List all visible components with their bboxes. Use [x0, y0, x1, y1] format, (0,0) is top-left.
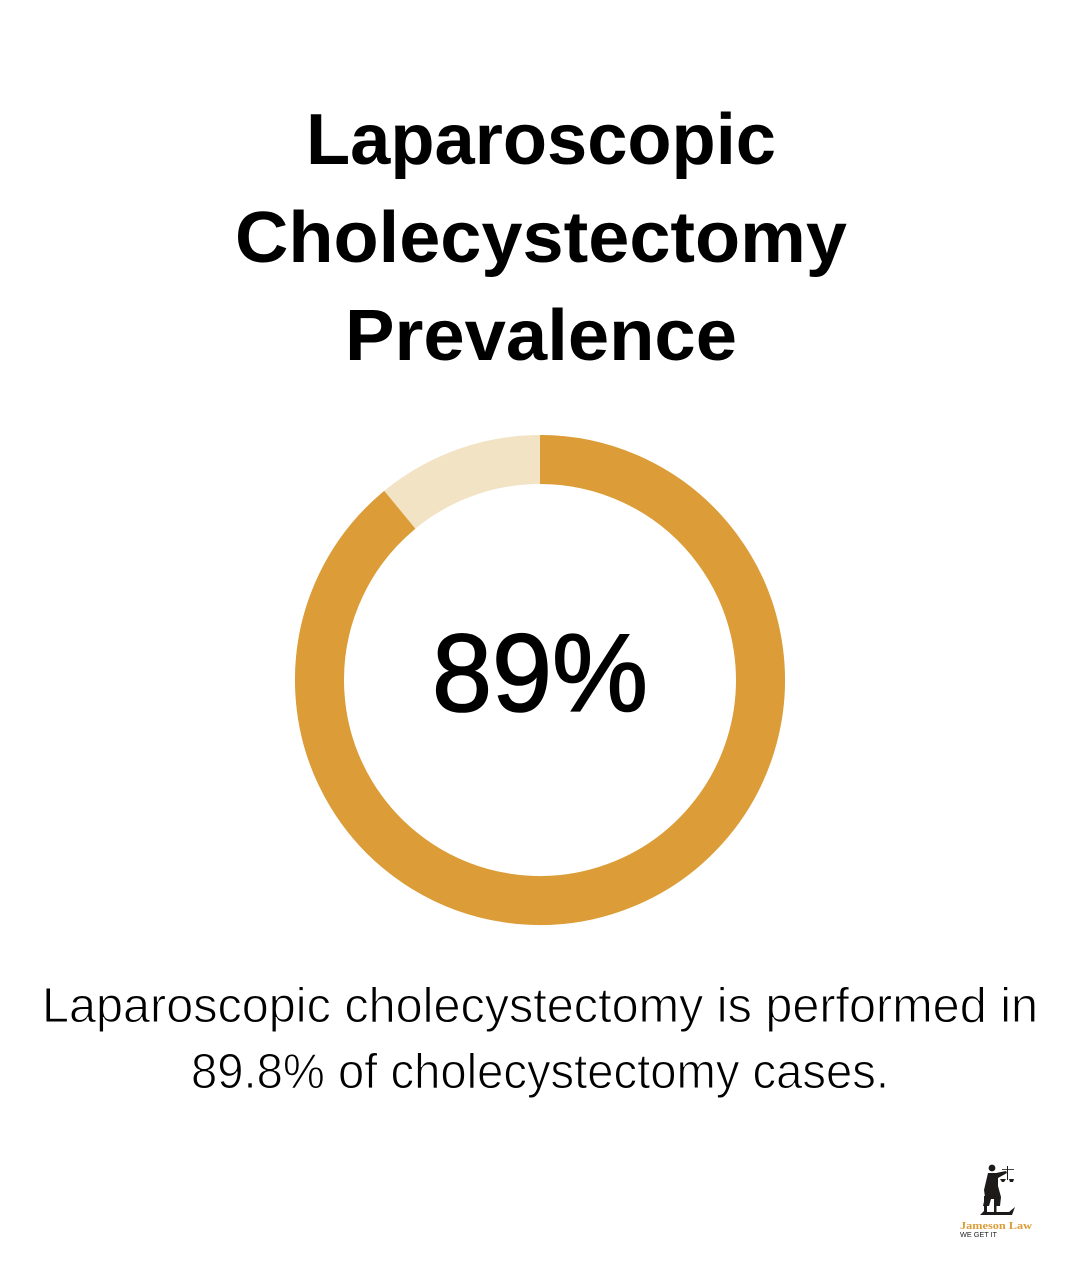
title: Laparoscopic	[306, 100, 776, 180]
title: Prevalence	[345, 296, 737, 376]
description text	[42, 979, 1038, 1099]
donut chart: 89%	[319, 460, 760, 901]
icon: lady justice	[980, 1165, 1015, 1215]
description text: 89.8% of cholecystectomy cases.	[191, 1045, 889, 1099]
donut centre value: 89%	[432, 612, 648, 735]
title	[235, 100, 847, 376]
title: Cholecystectomy	[235, 198, 847, 278]
donut remainder segment: 11%	[320, 460, 760, 900]
logo name: Jameson Law	[960, 1220, 1032, 1232]
logo: Jameson Law	[960, 1165, 1032, 1239]
description text: Laparoscopic cholecystectomy is performed in	[42, 979, 1038, 1033]
logo tagline: WE GET IT	[960, 1230, 997, 1239]
donut value segment: 89%	[319, 460, 760, 901]
